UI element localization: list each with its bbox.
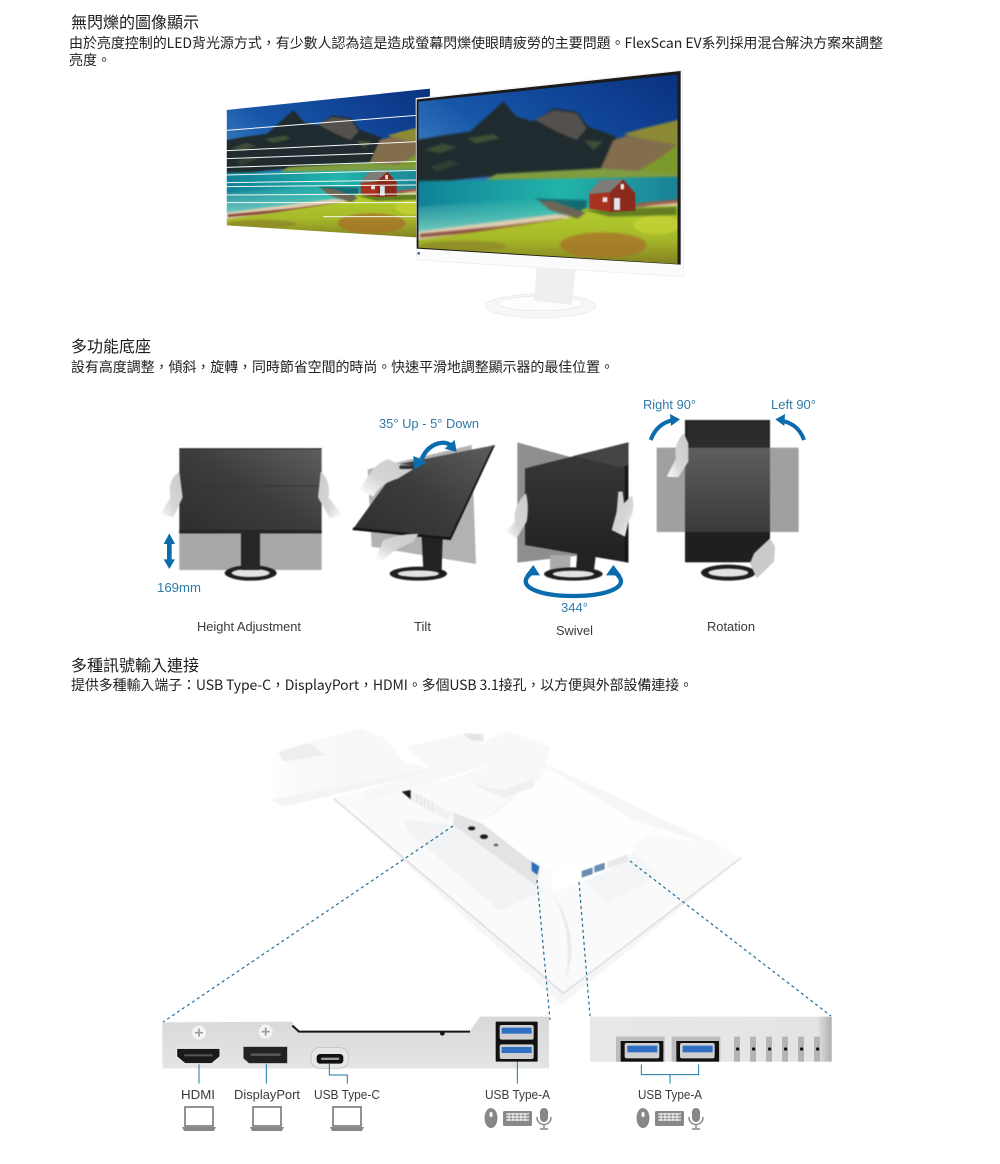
gray strip	[162, 1017, 549, 1068]
diagram: height adjustment and tilt	[160, 440, 495, 581]
diagram: swivel and rotation	[506, 414, 804, 596]
stand arm	[267, 728, 432, 800]
icon: laptop USB-C	[330, 1107, 364, 1131]
dashed callout lines	[163, 826, 831, 1022]
label: left 90: Left 90°	[771, 397, 816, 412]
text block: flicker-free description: 亮度。	[69, 50, 111, 70]
label: DisplayPort: DisplayPort	[234, 1087, 300, 1102]
swivel monitor	[506, 442, 633, 581]
arrow: tilt	[413, 440, 457, 469]
heading: stand: 多功能底座	[71, 333, 151, 357]
arrow: height	[164, 533, 175, 569]
label: USB Type-A left: USB Type-A	[485, 1087, 550, 1102]
gray strip	[590, 1017, 832, 1062]
label: USB Type-C left: USB Type-C	[314, 1087, 380, 1102]
screws	[192, 1025, 273, 1040]
icon: peripherals left	[484, 1108, 551, 1129]
panel: rear ports right	[590, 1017, 832, 1084]
port bay	[453, 813, 540, 887]
heading: inputs: 多種訊號輸入連接	[71, 652, 199, 676]
icon: peripherals right	[636, 1108, 703, 1129]
flickering rear screen	[220, 85, 434, 243]
icon: laptop DisplayPort	[250, 1107, 284, 1131]
USB-A ports	[616, 1037, 720, 1062]
arrows: rotation	[651, 414, 804, 440]
USB-C port	[311, 1048, 348, 1068]
text block: flicker-free description: 由於亮度控制的LED背光源方式，有少數人認為這是造成螢幕閃爍使眼睛疲勞的主要問題。FlexScan EV系列採用混合解決方案來調整	[69, 33, 883, 53]
connector bracket	[641, 1064, 699, 1084]
label: 344: 344°	[561, 600, 588, 615]
label: 35 up 5 down: 35° Up - 5° Down	[379, 416, 479, 431]
label: tilt: Tilt	[414, 619, 431, 634]
DisplayPort port	[243, 1047, 287, 1063]
panel: rear ports left	[162, 1017, 549, 1084]
label: swivel: Swivel	[556, 623, 593, 638]
USB-A ports	[496, 1022, 538, 1062]
text block: inputs description: 提供多種輸入端子：USB Type-C，DisplayPort，HDMI。多個USB 3.1接孔，以方便與外部設備連接。	[71, 675, 693, 695]
label: right 90: Right 90°	[643, 397, 696, 412]
tilt monitor	[352, 445, 495, 581]
HDMI port	[177, 1048, 220, 1064]
label: rotation: Rotation	[707, 619, 755, 634]
label: USB Type-A right: USB Type-A	[638, 1087, 702, 1102]
text block: stand description: 設有高度調整，傾斜，旋轉，同時節省空間的時尚。快速平滑地調整顯示器的最佳位置。	[71, 357, 614, 377]
monitor back	[267, 728, 743, 1005]
connector lines	[199, 1062, 517, 1084]
front monitor	[410, 70, 683, 318]
icon: laptop HDMI	[182, 1107, 216, 1131]
vents	[734, 1037, 820, 1062]
label: 169mm: 169mm	[157, 580, 201, 595]
label: height adjustment: Height Adjustment	[197, 619, 301, 634]
illustration: monitor rear view	[267, 728, 743, 1005]
height adjustment monitor	[160, 448, 342, 581]
heading: flicker-free: 無閃爍的圖像顯示	[71, 9, 199, 33]
illustration: two monitors comparison	[220, 70, 683, 318]
rotation monitor	[657, 420, 799, 581]
arrow: swivel	[525, 565, 621, 596]
white cover	[482, 767, 717, 872]
label: HDMI: HDMI	[181, 1087, 215, 1102]
